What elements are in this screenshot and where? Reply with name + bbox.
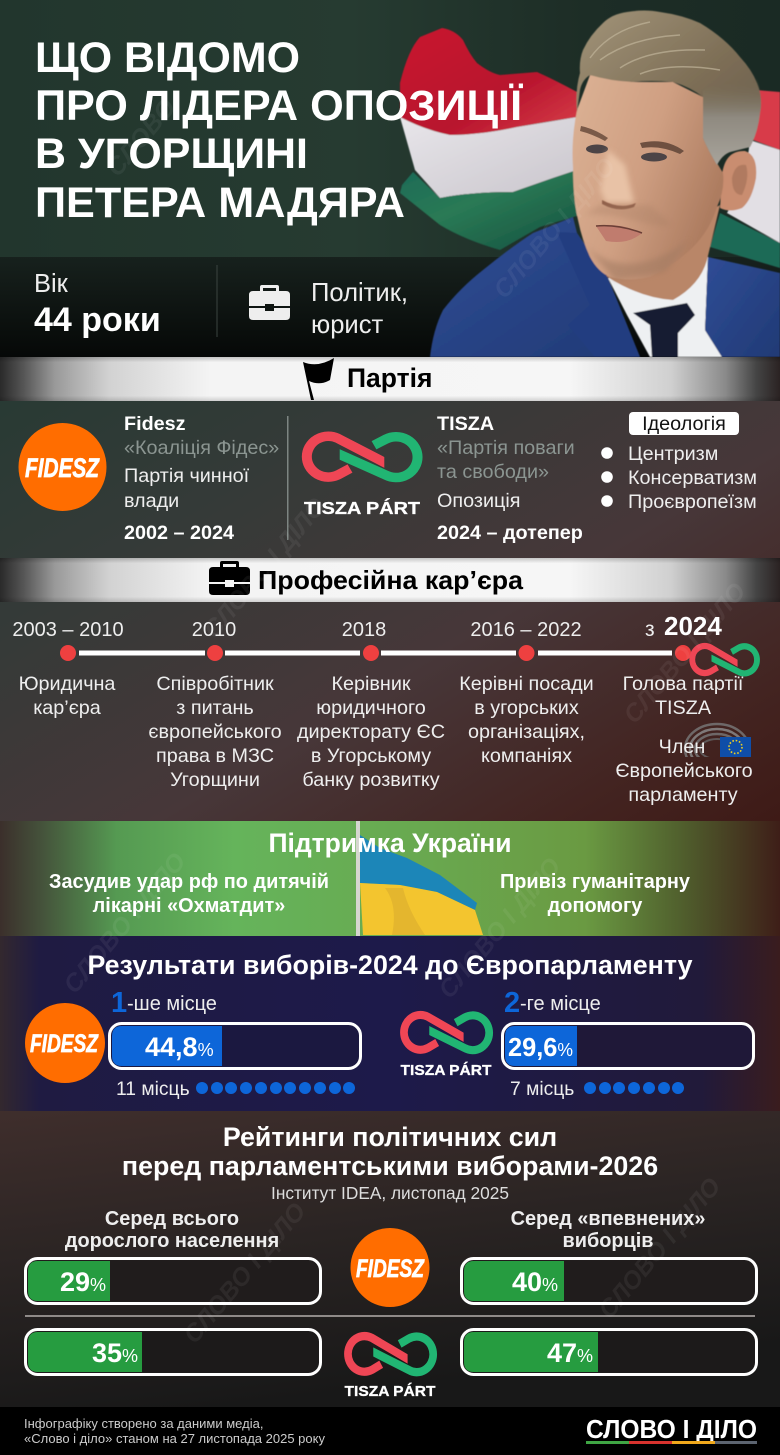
panel: ratings heading: Інститут IDEA, листопад 2025 bbox=[271, 1183, 509, 1203]
panel: ratings heading bbox=[122, 1122, 658, 1203]
seats TISZA bbox=[510, 1079, 684, 1100]
face bbox=[572, 75, 723, 280]
place label Fidesz bbox=[111, 987, 217, 1019]
career step 4: Керівні посади bbox=[459, 673, 594, 695]
panel: ideology: Ідеологія bbox=[642, 413, 726, 435]
watermarks: СЛОВО І ДІЛО bbox=[618, 577, 752, 729]
logo: Fidesz bbox=[350, 1228, 430, 1307]
hair bbox=[576, 10, 761, 165]
panel: EP election results bbox=[0, 936, 780, 1111]
hair streaks bbox=[590, 22, 720, 74]
seats Fidesz bbox=[116, 1079, 355, 1100]
timeline dates bbox=[12, 611, 722, 641]
career step 5: парламенту bbox=[628, 784, 738, 806]
career step 2: права в МЗС bbox=[156, 745, 274, 767]
title: В УГОРЩИНІ bbox=[35, 130, 308, 178]
panel: support for Ukraine: Привіз гуманітарну bbox=[500, 871, 690, 893]
column heading: all adults: Серед всього bbox=[105, 1208, 239, 1230]
logo: Fidesz: FIDESZ bbox=[25, 453, 100, 483]
career step 4 bbox=[459, 673, 594, 767]
title: ЩО ВІДОМО bbox=[35, 34, 300, 82]
timeline dates: 2010 bbox=[192, 619, 236, 641]
icon: briefcase, white bbox=[249, 285, 290, 320]
watermarks: СЛОВО bbox=[101, 93, 182, 182]
career step 3: банку розвитку bbox=[302, 769, 440, 791]
place label TISZA: -ге місце bbox=[520, 993, 601, 1015]
logo: Fidesz: FIDESZ bbox=[30, 1030, 99, 1058]
logo: TISZA bbox=[304, 436, 420, 518]
career step 3 bbox=[297, 673, 445, 791]
career step 2 bbox=[148, 673, 282, 791]
column heading: confident voters: виборців bbox=[562, 1230, 654, 1252]
career step 4: компаніях bbox=[481, 745, 572, 767]
bar: Fidesz adults 29% bbox=[26, 1258, 320, 1304]
column heading: confident voters: Серед «впевнених» bbox=[511, 1208, 705, 1230]
logo: TISZA: TISZA PÁRT bbox=[304, 497, 420, 518]
hair grey side bbox=[703, 78, 761, 165]
panel: TISZA party: та свободи» bbox=[437, 461, 549, 483]
bar: Fidesz confident 40% bbox=[462, 1258, 756, 1304]
panel: ideology: Центризм bbox=[628, 443, 718, 465]
bar: TISZA adults 35%: 35% bbox=[92, 1338, 138, 1368]
logo: Fidesz bbox=[25, 1003, 105, 1083]
bar: TISZA adults 35% bbox=[26, 1330, 320, 1374]
icon: black flag bbox=[303, 358, 334, 400]
logo: TISZA: TISZA PÁRT bbox=[344, 1383, 436, 1400]
band: career heading: Професійна кар’єра bbox=[258, 565, 524, 595]
footer bbox=[0, 1407, 780, 1455]
flag: left part bbox=[400, 28, 580, 250]
band: career heading bbox=[0, 558, 780, 602]
watermarks bbox=[58, 93, 752, 1349]
column heading: all adults: дорослого населення bbox=[65, 1230, 279, 1252]
panel: support for Ukraine: Підтримка України bbox=[268, 828, 512, 858]
panel: ideology: Консерватизм bbox=[628, 467, 757, 489]
profession text: юрист bbox=[311, 311, 384, 339]
neck and shirt bbox=[606, 205, 722, 357]
career step 5 bbox=[615, 673, 753, 806]
info strip background bbox=[0, 257, 780, 357]
panel divider bbox=[287, 416, 288, 540]
bar: TISZA 29.6% bbox=[502, 1024, 754, 1068]
place label Fidesz: 1 bbox=[111, 987, 127, 1019]
career step 4: в угорських bbox=[474, 697, 579, 719]
watermarks: СЛОВО І ДІЛО bbox=[178, 1197, 312, 1349]
career step 1: Юридична bbox=[19, 673, 115, 695]
career step 2: Угорщини bbox=[170, 769, 260, 791]
band: party heading: Партія bbox=[347, 363, 432, 393]
panel: Fidesz party: 2002 – 2024 bbox=[124, 522, 234, 544]
career step 5: Член bbox=[659, 736, 705, 758]
icon: European Parliament bbox=[684, 722, 751, 757]
photo: Hungarian flag and portrait of Péter Magyar bbox=[400, 10, 780, 357]
watermarks: СЛОВО І ДІЛО bbox=[198, 492, 332, 644]
footer: Інфографіку створено за даними медіа, bbox=[24, 1416, 263, 1431]
divider between parties bbox=[25, 1315, 755, 1317]
timeline dates: 2016 – 2022 bbox=[470, 619, 582, 641]
timeline dates: 2018 bbox=[342, 619, 386, 641]
logo: Слово і діло: СЛОВО І ДІЛО bbox=[586, 1414, 757, 1444]
column heading: all adults bbox=[65, 1208, 279, 1252]
bar: Fidesz adults 29%: 29% bbox=[60, 1267, 106, 1297]
logo: TISZA: TISZA PÁRT bbox=[400, 1062, 492, 1079]
timeline dates: з bbox=[645, 618, 655, 641]
timeline dates: 2024 bbox=[664, 611, 722, 641]
career step 2: європейського bbox=[148, 721, 282, 743]
panel: ideology bbox=[601, 412, 757, 513]
logo: TISZA small bbox=[692, 646, 757, 673]
panel: ratings heading: перед парламентськими виборами-2026 bbox=[122, 1151, 658, 1181]
panel: support for Ukraine: Засудив удар рф по дитячій bbox=[49, 871, 329, 893]
bar: TISZA confident 47%: 47% bbox=[547, 1338, 593, 1368]
career step 5: Європейського bbox=[615, 760, 753, 782]
title: ПЕТЕРА МАДЯРА bbox=[35, 179, 405, 227]
panel: Fidesz party: «Коаліція Фідес» bbox=[124, 437, 279, 459]
career timeline bbox=[12, 611, 757, 806]
career step 1 bbox=[19, 673, 115, 719]
logo: Fidesz bbox=[18, 423, 106, 511]
column heading: confident voters bbox=[511, 1208, 705, 1252]
jacket bbox=[430, 217, 780, 357]
logo: TISZA bbox=[400, 1015, 492, 1079]
age block bbox=[34, 270, 161, 339]
watermarks: СЛОВО І ДІЛО bbox=[488, 152, 622, 304]
ear bbox=[720, 151, 756, 210]
panel: TISZA party: TISZA bbox=[437, 413, 494, 435]
profession text: Політик, bbox=[311, 279, 408, 307]
bar: TISZA confident 47% bbox=[462, 1330, 756, 1374]
watermarks: СЛОВО І ДІЛО bbox=[433, 852, 567, 1004]
logo: Fidesz: FIDESZ bbox=[356, 1255, 425, 1283]
icon: black briefcase bbox=[209, 561, 250, 595]
career step 3: юридичного bbox=[316, 697, 426, 719]
panel: ideology: Проєвропеїзм bbox=[628, 491, 757, 513]
career step 1: кар’єра bbox=[33, 697, 101, 719]
panel: TISZA party: «Партія поваги bbox=[437, 437, 575, 459]
band: party heading bbox=[0, 357, 780, 401]
age block: Вік bbox=[34, 270, 69, 298]
panel: TISZA party: Опозиція bbox=[437, 490, 520, 512]
divider bbox=[216, 265, 218, 337]
place label Fidesz: -ше місце bbox=[127, 993, 217, 1015]
career step 5: TISZA bbox=[655, 697, 712, 719]
place label TISZA: 2 bbox=[504, 987, 520, 1019]
panel: Fidesz party: Fidesz bbox=[124, 413, 186, 435]
panel: EP election results: Результати виборів-2024 до Європарламенту bbox=[87, 950, 693, 980]
panel: TISZA party bbox=[304, 413, 583, 544]
watermarks: СЛОВО І ДІЛО bbox=[58, 847, 192, 999]
facial features bbox=[580, 126, 690, 280]
footer: «Слово і діло» станом на 27 листопада 2025 року bbox=[24, 1431, 325, 1446]
career step 2: Співробітник bbox=[156, 673, 274, 695]
panel: Fidesz party bbox=[18, 413, 279, 544]
place label TISZA bbox=[504, 987, 601, 1019]
career step 3: директорату ЄС bbox=[297, 721, 445, 743]
icon: Ukrainian flag bbox=[356, 821, 483, 936]
career step 3: в Угорському bbox=[311, 745, 431, 767]
panel: ratings heading: Рейтинги політичних сил bbox=[223, 1122, 557, 1152]
watermarks: СЛОВО І ДІЛО bbox=[593, 1172, 727, 1324]
panel: support for Ukraine bbox=[0, 821, 780, 936]
flag: right part bbox=[710, 90, 780, 268]
career step 3: Керівник bbox=[331, 673, 411, 695]
career step 2: з питань bbox=[176, 697, 254, 719]
seats Fidesz: 11 місць bbox=[116, 1079, 190, 1100]
age block: 44 роки bbox=[34, 301, 161, 339]
title: ПРО ЛІДЕРА ОПОЗИЦІЇ bbox=[35, 82, 523, 130]
timeline dates: 2003 – 2010 bbox=[12, 619, 124, 641]
career step 4: організаціях, bbox=[468, 721, 585, 743]
bar: Fidesz 44.8% bbox=[110, 1024, 360, 1068]
panel: Fidesz party: влади bbox=[124, 490, 179, 512]
profession text bbox=[311, 279, 408, 339]
panel: Fidesz party: Партія чинної bbox=[124, 465, 250, 487]
career step 5: Голова партії bbox=[623, 673, 744, 695]
logo: TISZA bbox=[344, 1336, 436, 1400]
bar: TISZA 29.6%: 29,6% bbox=[508, 1032, 573, 1062]
bar: Fidesz 44.8%: 44,8% bbox=[145, 1032, 214, 1062]
title bbox=[35, 34, 523, 227]
timeline line and dots bbox=[60, 645, 691, 661]
panel: TISZA party: 2024 – дотепер bbox=[437, 522, 583, 544]
panel: support for Ukraine: допомогу bbox=[548, 895, 642, 917]
panel: support for Ukraine: лікарні «Охматдит» bbox=[93, 895, 285, 917]
seats TISZA: 7 місць bbox=[510, 1079, 574, 1100]
bar: Fidesz confident 40%: 40% bbox=[512, 1267, 558, 1297]
